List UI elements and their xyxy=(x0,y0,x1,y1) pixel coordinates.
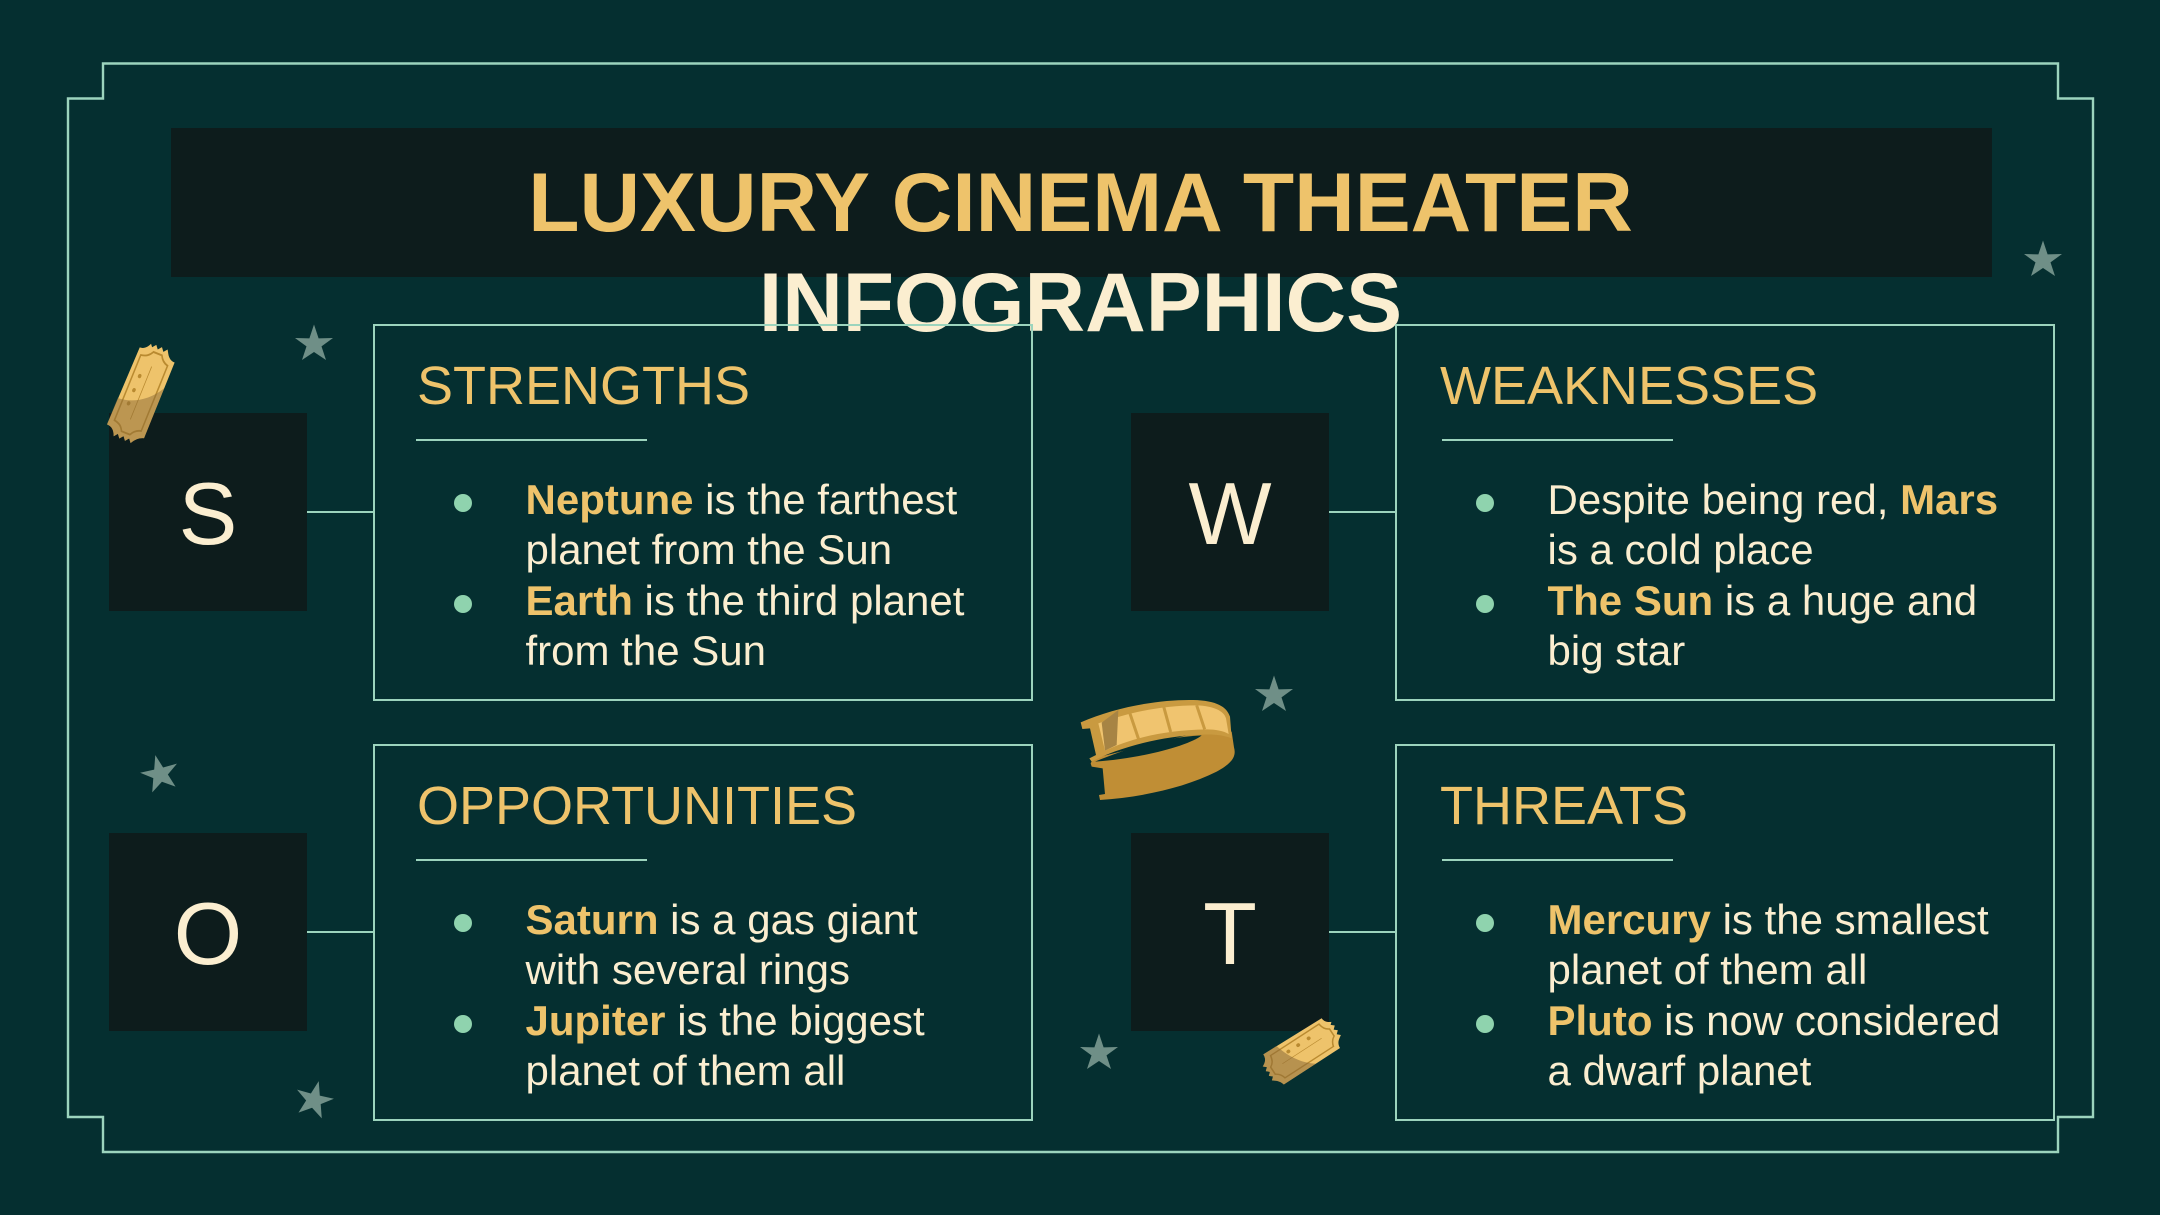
letter box T: T xyxy=(1203,884,1257,983)
star xyxy=(1255,676,1293,711)
letter box T xyxy=(1131,833,1329,1031)
bullet list: strengths: planet from the Sun xyxy=(526,526,892,573)
bullet list: weaknesses xyxy=(1476,476,1998,674)
bullet list: threats xyxy=(1476,896,2000,1094)
title: LUXURY CINEMA THEATER xyxy=(528,155,1633,249)
bullet list: threats: planet of them all xyxy=(1548,946,1867,993)
bullet list: opportunities: Saturn is a gas giant xyxy=(526,896,918,943)
bullet list: strengths: Neptune is the farthest xyxy=(526,476,957,523)
title xyxy=(528,155,1633,349)
star xyxy=(295,324,333,360)
title: INFOGRAPHICS xyxy=(759,255,1402,349)
letter box W xyxy=(1131,413,1329,611)
bullet list: opportunities xyxy=(454,896,925,1094)
letter box S xyxy=(109,413,307,611)
star xyxy=(140,755,177,792)
bullet list: weaknesses: Despite being red, Mars xyxy=(1548,476,1998,523)
icon: ticket xyxy=(107,344,175,444)
bullet list: threats: a dwarf planet xyxy=(1548,1047,1811,1094)
star xyxy=(1080,1034,1118,1069)
bullet list: strengths: from the Sun xyxy=(526,627,766,674)
bullet list: opportunities: planet of them all xyxy=(526,1047,845,1094)
bullet list: threats: Mercury is the smallest xyxy=(1548,896,1989,943)
bullet list: weaknesses: The Sun is a huge and xyxy=(1548,577,1977,624)
bullet list: threats: Pluto is now considered xyxy=(1548,997,2000,1044)
bullet list: strengths: Earth is the third planet xyxy=(526,577,964,624)
letter box O: O xyxy=(174,884,242,983)
icon: ticket xyxy=(1262,1018,1341,1084)
letter box O xyxy=(109,833,307,1031)
panel: strengths xyxy=(373,324,1033,701)
bullet list: opportunities: with several rings xyxy=(526,946,850,993)
star xyxy=(297,1081,334,1118)
icon: film reel strip xyxy=(1080,700,1235,800)
bullet list: weaknesses: is a cold place xyxy=(1548,526,1814,573)
letter box W: W xyxy=(1188,464,1272,563)
bullet list: weaknesses: big star xyxy=(1548,627,1685,674)
heading: opportunities: OPPORTUNITIES xyxy=(417,776,857,836)
panel: threats xyxy=(1395,744,2055,1121)
bullet list: opportunities: Jupiter is the biggest xyxy=(526,997,925,1044)
heading: strengths: STRENGTHS xyxy=(417,356,750,416)
panel: opportunities xyxy=(373,744,1033,1121)
bullet list: strengths xyxy=(454,476,964,674)
panel: weaknesses xyxy=(1395,324,2055,701)
heading: threats: THREATS xyxy=(1440,776,1688,836)
letter box S: S xyxy=(179,464,237,563)
heading: weaknesses: WEAKNESSES xyxy=(1440,356,1818,416)
star xyxy=(2024,240,2062,276)
title bar xyxy=(171,128,1992,277)
